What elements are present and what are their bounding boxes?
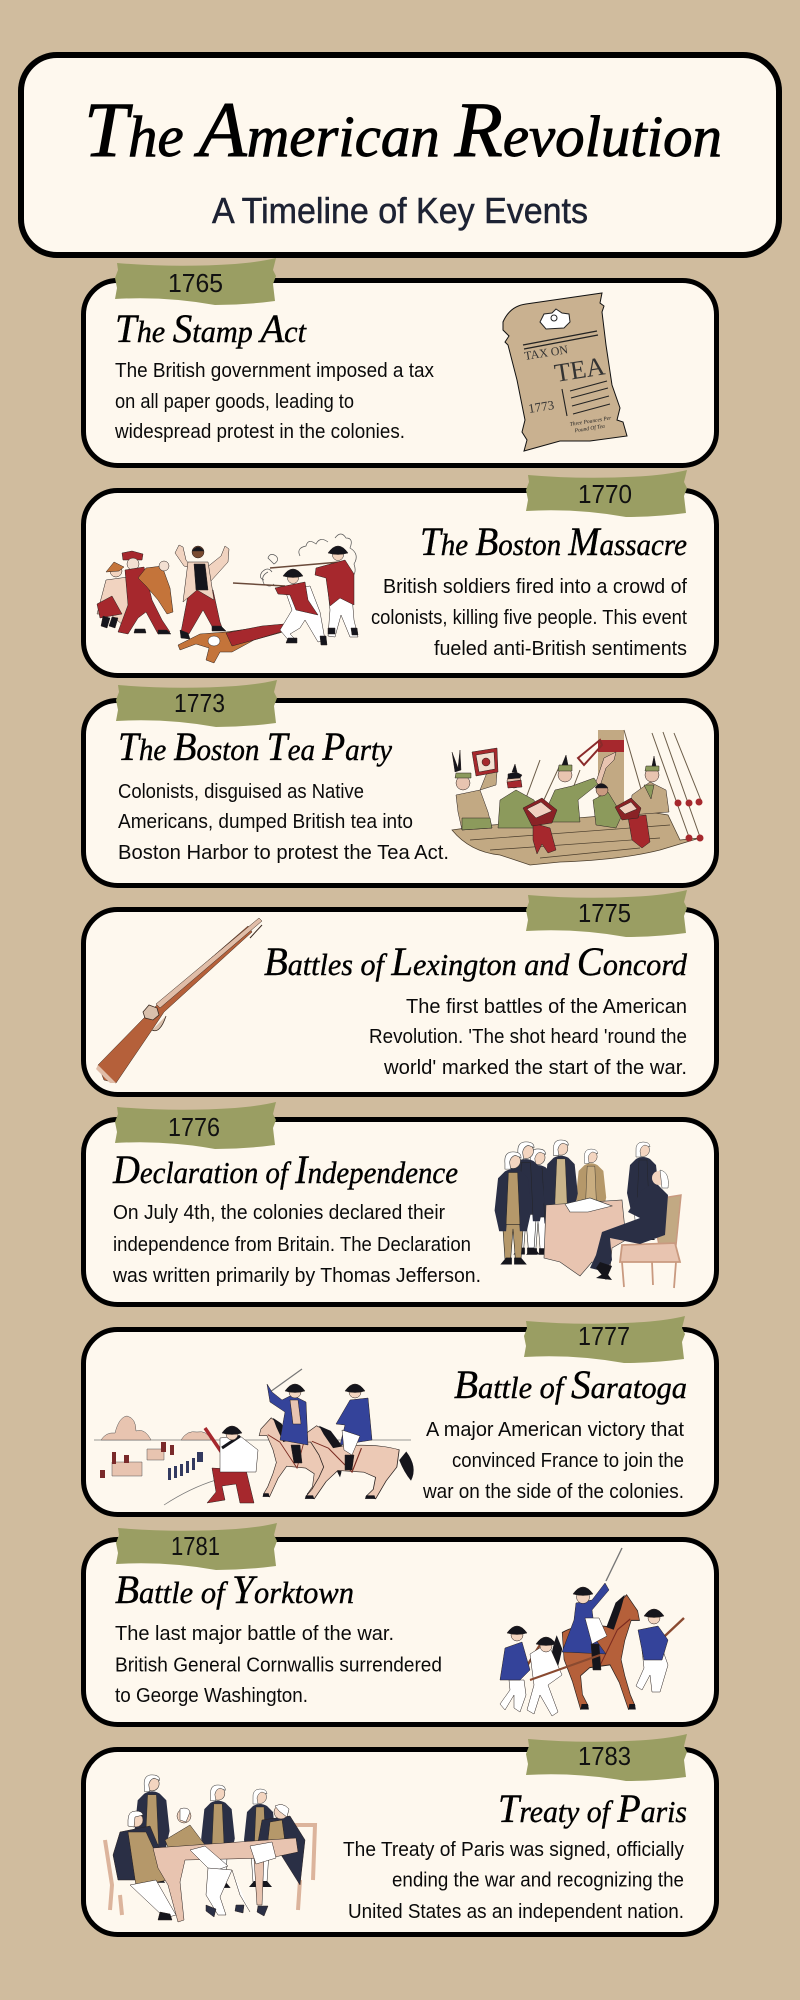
soldier in white, centre (527, 1637, 600, 1716)
body text (114, 359, 435, 443)
soldier in blue, right (636, 1609, 684, 1692)
year tag 1775 (526, 890, 687, 937)
icon: tax on tea parchment (503, 293, 627, 451)
body text (422, 1418, 684, 1503)
icon: tax on tea parchment: 1773 (527, 397, 555, 416)
year tag 1783: 1783 (578, 1741, 631, 1771)
chairs (105, 1825, 315, 1915)
mounted officer with sabre (267, 1369, 308, 1463)
table with papers (544, 1200, 626, 1276)
year tag 1777: 1777 (578, 1321, 630, 1351)
year tag 1765 (115, 258, 276, 305)
rigging knots (674, 798, 704, 842)
mounted general with sabre (562, 1548, 622, 1670)
crowd carrying wounded man (97, 551, 173, 634)
body text (343, 1838, 685, 1923)
panel: 1781 Battle of Yorktown (84, 1523, 716, 1724)
year tag 1765: 1765 (168, 268, 223, 298)
panel: 1777 Battle of Saratoga (84, 1316, 716, 1514)
distant troops and fences (100, 1442, 203, 1480)
illustration: tea party ship (452, 730, 704, 865)
body text: British soldiers fired into a crowd of (383, 575, 687, 598)
heading: Battles of Lexington and Concord (264, 939, 687, 984)
year tag 1775: 1775 (578, 898, 631, 928)
illustration: signing the treaty (105, 1775, 315, 1922)
year tag 1773: 1773 (174, 688, 225, 718)
body text: war on the side of the colonies. (422, 1480, 684, 1503)
body text: British General Cornwallis surrendered (115, 1654, 442, 1676)
soldier in blue, left (500, 1626, 543, 1712)
body text: Boston Harbor to protest the Tea Act. (118, 841, 449, 864)
panel: 1773 The Boston Tea Party (84, 680, 716, 886)
panel: title header (21, 55, 779, 255)
horses (259, 1418, 342, 1497)
body text (112, 1201, 481, 1287)
year tag 1773 (116, 680, 277, 727)
hull (452, 812, 700, 865)
panel: 1770 The Boston Massacre (84, 470, 716, 676)
body text: independence from Britain. The Declaration (113, 1233, 471, 1256)
year tag 1770 (526, 470, 687, 517)
body text: On July 4th, the colonies declared their (113, 1201, 445, 1224)
body text: was written primarily by Thomas Jefferson. (112, 1264, 481, 1287)
body text: The first battles of the American (406, 995, 687, 1018)
rigging (515, 730, 702, 837)
body text: A major American victory that (426, 1418, 684, 1441)
year tag 1776: 1776 (168, 1112, 220, 1142)
heading: The Stamp Act (115, 306, 307, 351)
mounted officer (336, 1384, 372, 1470)
year tag 1781 (116, 1523, 277, 1570)
tea chests pouring (523, 798, 650, 854)
panel: 1783 Treaty of Paris (84, 1734, 716, 1934)
body text: world' marked the start of the war. (383, 1056, 687, 1079)
illustration: signing the declaration (495, 1140, 681, 1288)
heading: Declaration of Independence (112, 1147, 458, 1192)
smoke (260, 534, 356, 586)
icon: tax on tea parchment: TEA (552, 351, 607, 388)
firing soldiers (233, 546, 358, 645)
delegates standing (134, 1775, 170, 1883)
illustration: massacre scene (97, 534, 358, 663)
standing man with raised arms (175, 545, 229, 639)
subtitle: A Timeline of Key Events (212, 190, 588, 231)
founders standing (627, 1142, 659, 1240)
fallen man (178, 624, 285, 663)
body text: Revolution. 'The shot heard 'round the (369, 1025, 687, 1048)
body text: on all paper goods, leading to (115, 390, 354, 413)
rearing horse (551, 1595, 639, 1709)
mast (598, 730, 624, 813)
body text: The last major battle of the war. (115, 1622, 394, 1645)
body text: United States as an independent nation. (348, 1900, 684, 1923)
icon: musket (96, 918, 262, 1083)
seated man in chair (590, 1170, 681, 1288)
year tag 1783 (526, 1734, 687, 1781)
illustration: yorktown charge (500, 1548, 684, 1716)
title: The American Revolution (84, 86, 722, 173)
year tag 1776 (115, 1102, 276, 1149)
body text: The Treaty of Paris was signed, officially (343, 1838, 685, 1861)
body text: to George Washington. (115, 1684, 308, 1707)
body text: fueled anti-British sentiments (434, 637, 687, 660)
heading: Battle of Saratoga (454, 1362, 687, 1407)
body text: Americans, dumped British tea into (118, 810, 413, 833)
kneeling soldier (205, 1426, 258, 1503)
heading: The Boston Tea Party (118, 724, 392, 769)
heading: Battle of Yorktown (115, 1567, 354, 1612)
body text (369, 995, 687, 1079)
distant landscape (94, 1440, 411, 1505)
body text: Colonists, disguised as Native (118, 780, 364, 803)
panel: 1775 Battles of Lexington and Concord (84, 890, 716, 1094)
illustration: saratoga battlefield (94, 1369, 414, 1505)
year tag 1777 (524, 1316, 685, 1363)
body text (118, 780, 449, 864)
treaty table (153, 1838, 298, 1922)
body text: ending the war and recognizing the (392, 1868, 684, 1892)
figures in disguise (452, 740, 669, 830)
delegates seated (113, 1805, 305, 1920)
icon: tax on tea parchment: Three Pounces Per (569, 415, 613, 428)
heading: Treaty of Paris (498, 1786, 687, 1831)
panel: 1776 Declaration of Independence (84, 1102, 716, 1304)
body text (115, 1622, 442, 1707)
body text: colonists, killing five people. This event (371, 606, 687, 629)
panel: 1765 The Stamp Act (84, 258, 716, 466)
year tag 1770: 1770 (578, 479, 632, 509)
icon: tax on tea parchment: Pound Of Tea (573, 423, 606, 434)
year tag 1781: 1781 (171, 1531, 220, 1561)
body text: The British government imposed a tax (115, 359, 435, 382)
body text: widespread protest in the colonies. (114, 420, 405, 443)
body text (371, 575, 687, 660)
icon: tax on tea parchment: TAX ON (523, 342, 569, 363)
body text: convinced France to join the (452, 1449, 684, 1472)
heading: The Boston Massacre (420, 519, 687, 564)
